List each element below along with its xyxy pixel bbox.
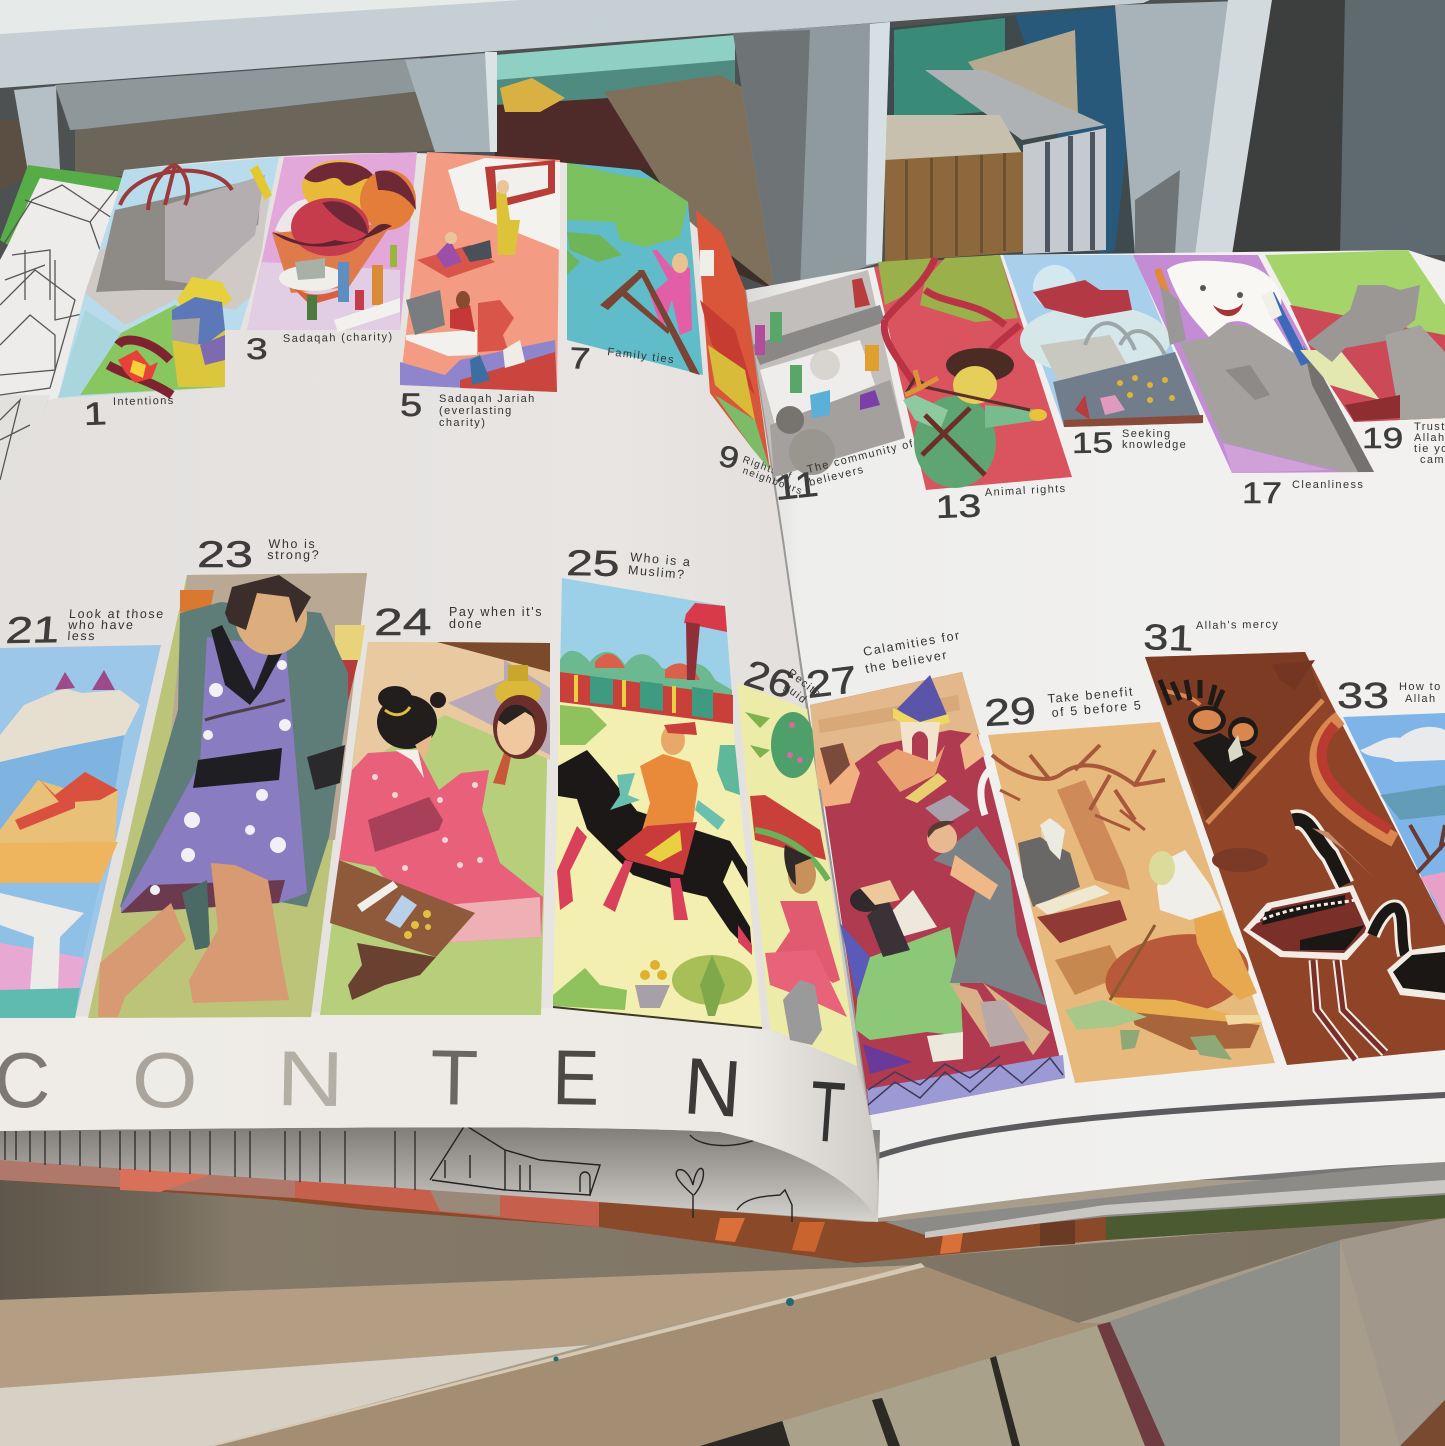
number label: who have [67, 618, 135, 632]
panel 11: community of believers [747, 270, 915, 508]
number label: 24 [374, 601, 431, 643]
background: bookshelf [0, 0, 1445, 300]
number label: 31 [1143, 616, 1194, 659]
number label: 27 [804, 658, 859, 706]
number label: Allah [1405, 693, 1436, 705]
number label: 5 [400, 387, 422, 423]
number label: Who is a [630, 550, 692, 569]
number label: (everlasting [439, 405, 513, 417]
green cover edge and sketch endpaper [0, 165, 124, 245]
heading: CONTENT: N [276, 1035, 345, 1123]
book cover [0, 165, 1445, 1263]
number label: Seeking [1122, 428, 1172, 440]
number label: 29 [983, 689, 1037, 734]
number label: Sadaqah Jariah [439, 393, 536, 405]
number label: Muslim? [628, 563, 686, 582]
number label: 13 [935, 488, 982, 525]
panel 26: guidance [737, 651, 857, 1066]
panel 31: Allah's mercy [1143, 616, 1445, 1065]
number label: Recite [785, 667, 824, 701]
number label [374, 601, 543, 643]
number label: Take benefit [1047, 684, 1135, 706]
number label: 1 [83, 395, 107, 432]
heading: CONTENT [0, 1033, 848, 1161]
number label: How to [1399, 681, 1442, 693]
panel: line-art left page sketch [0, 185, 118, 480]
number label: Intentions [113, 395, 175, 408]
number label: 9 [715, 439, 742, 476]
number label [1362, 421, 1445, 466]
panel 3: Sadaqah [246, 152, 417, 366]
number label: Pay when it's [449, 605, 543, 619]
number label: of 5 before 5 [1051, 698, 1143, 720]
number label: cam [1420, 454, 1445, 466]
panel 23: Who is strong? [88, 534, 367, 1018]
number label: 3 [246, 333, 268, 366]
heading: CONTENT: N [681, 1041, 744, 1134]
heading: CONTENT: O [132, 1038, 198, 1124]
area beneath curled left page with line art [0, 1125, 880, 1222]
number label [983, 684, 1143, 734]
right page [745, 250, 1445, 1238]
number label: Calamities for [862, 628, 962, 659]
number label: believers [808, 464, 866, 489]
panel 24: Pay when it's done [320, 601, 550, 1015]
number label: guid [781, 681, 809, 707]
number label: done [449, 617, 483, 631]
number label: 15 [1072, 427, 1113, 460]
panel 5: Sadaqah Jariah [400, 152, 560, 429]
number label: less [67, 629, 97, 643]
heading: CONTENT: E [552, 1034, 600, 1122]
number label [246, 331, 394, 366]
number label: Rights of [741, 454, 794, 483]
number label [1337, 675, 1442, 716]
number label [1143, 616, 1279, 659]
number label: 26 [739, 651, 799, 707]
number label: Animal rights [985, 483, 1067, 499]
panel 33: How to love Allah [1337, 675, 1445, 925]
number label [4, 607, 165, 652]
panel 27: Calamities for the believer [804, 628, 1065, 1115]
panel 1: Intentions [58, 157, 279, 432]
number label [566, 543, 692, 584]
panel 13: Animal rights [874, 255, 1072, 525]
panel 15: Seeking knowledge [1003, 255, 1203, 460]
number label: 21 [4, 609, 61, 652]
heading: CONTENT: T [430, 1033, 479, 1122]
number label [83, 395, 175, 432]
number label: the believer [864, 648, 949, 676]
number label: Look at those [69, 607, 165, 621]
footer rule [875, 1092, 1445, 1160]
number label [773, 438, 915, 508]
number label: 23 [197, 534, 253, 575]
left page [0, 153, 878, 1215]
number label [569, 342, 676, 376]
number label: 7 [569, 342, 591, 376]
number label: The community of [806, 438, 915, 476]
number label [197, 534, 321, 575]
panel 21: Look at those who have less [0, 607, 165, 1018]
number label: Allah's mercy [1196, 619, 1279, 632]
background: shelf surface below the book [0, 1178, 1445, 1446]
panel 7: Family ties [567, 163, 703, 376]
number label [804, 628, 962, 706]
number label: Family ties [607, 346, 676, 366]
number label: 11 [773, 465, 820, 508]
number label [400, 387, 536, 429]
number label: Sadaqah (charity) [283, 331, 394, 345]
panel 29: Take benefit of 5 before 5 [983, 684, 1275, 1083]
number label [1072, 427, 1187, 460]
number label: 19 [1362, 423, 1403, 455]
panel 17: Cleanliness [1133, 255, 1374, 510]
number label: strong? [267, 548, 320, 562]
number label: 33 [1337, 675, 1389, 716]
number label [1242, 477, 1364, 510]
number label [715, 439, 804, 498]
number label: Cleanliness [1292, 479, 1364, 491]
panel 19: Trust in Allah [1265, 250, 1445, 466]
number label [935, 483, 1067, 525]
number label: knowledge [1122, 439, 1187, 451]
heading: CONTENT: T [807, 1063, 848, 1161]
number label: Who is [268, 537, 316, 551]
panel 9: Rights of neighbours [696, 210, 804, 498]
panel 25: Who is a Muslim? [553, 543, 762, 1028]
number label: 25 [566, 543, 620, 584]
number label: charity) [439, 417, 486, 429]
number label: 17 [1242, 477, 1282, 510]
number label: neighbours [741, 465, 804, 498]
